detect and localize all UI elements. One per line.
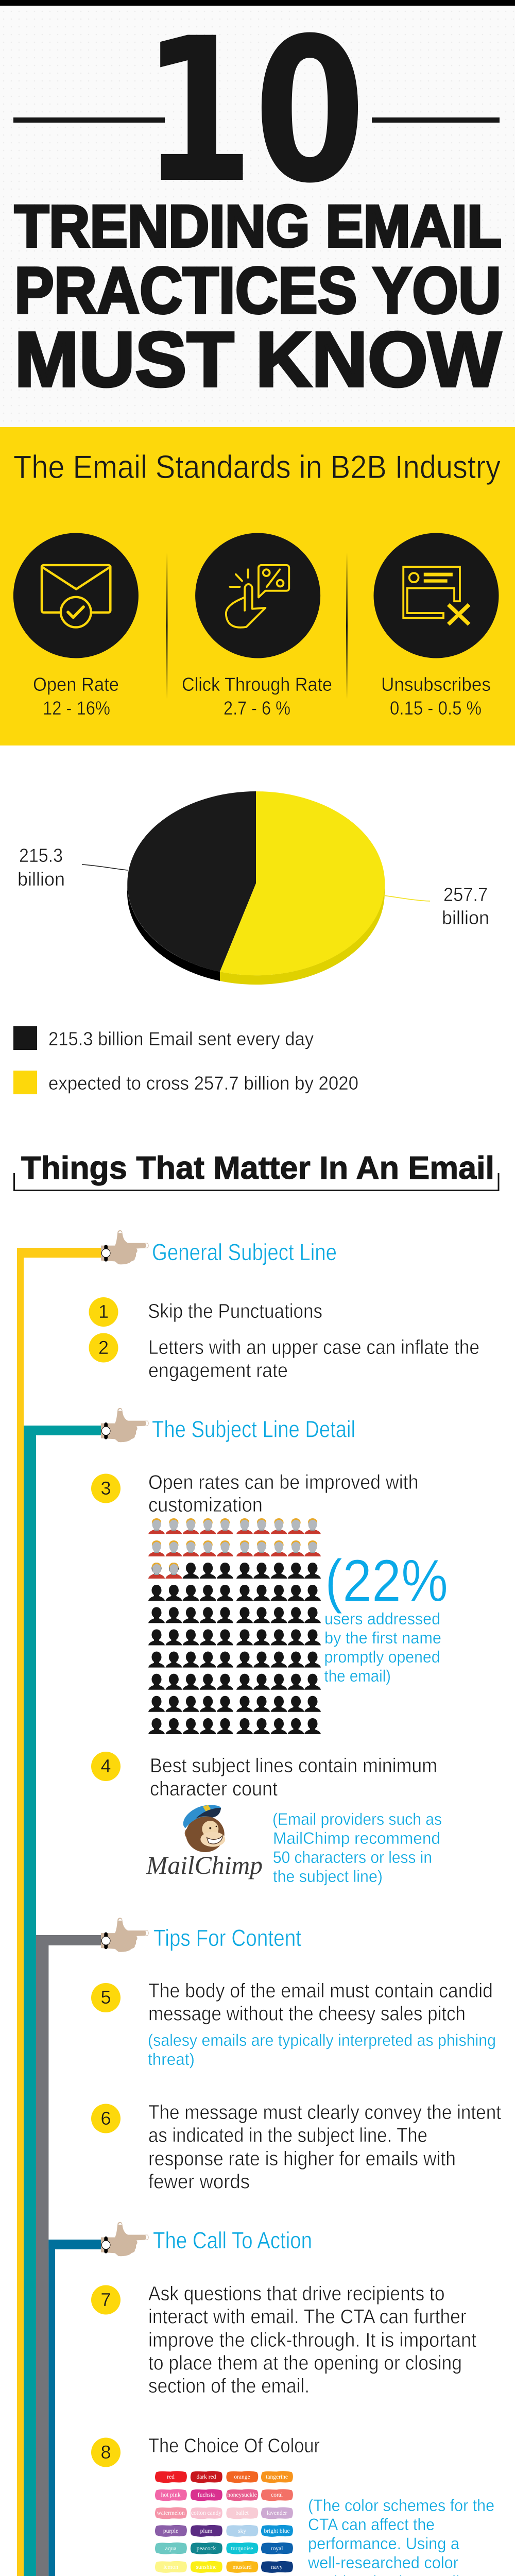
tip 5: The body of the email must contain candid xyxy=(148,1980,493,2002)
callout: mailchimp recommendation: the subject line) xyxy=(273,1867,383,1886)
colour swatches: dark red xyxy=(197,2474,216,2480)
colour swatches xyxy=(155,2471,293,2576)
colour swatches: ballet xyxy=(235,2510,249,2516)
colour swatches: turquoise xyxy=(231,2546,253,2552)
tip 4: 4 xyxy=(100,1755,111,1776)
tip 5 xyxy=(91,1980,496,2069)
tip 2: Letters with an upper case can inflate the xyxy=(148,1336,479,1359)
tip 5: message without the cheesy sales pitch xyxy=(148,2003,466,2025)
colour swatches: watermelon xyxy=(157,2510,185,2516)
colour swatches: fuchsia xyxy=(198,2492,215,2498)
tip 6: as indicated in the subject line. The xyxy=(148,2125,427,2146)
colour swatches: orange xyxy=(234,2474,250,2480)
colour swatches: tangerine xyxy=(266,2474,288,2480)
pie label right xyxy=(442,884,489,928)
callout: mailchimp recommendation: (Email providers such as xyxy=(272,1810,442,1828)
panel: email standards xyxy=(0,427,515,745)
section title: Tips For Content xyxy=(153,1925,301,1951)
icon: click percent xyxy=(195,533,320,658)
tip 2 xyxy=(89,1333,479,1382)
callout: mailchimp recommendation: MailChimp recommend xyxy=(273,1829,440,1848)
section title: General Subject Line xyxy=(152,1239,337,1265)
people pictogram 22 percent xyxy=(148,1518,321,1734)
callout: colour schemes: CTA can affect the xyxy=(308,2515,435,2534)
callout: 22 percent: (22% xyxy=(325,1547,448,1614)
tip 8: The Choice Of Colour xyxy=(148,2435,320,2457)
section title: The Call To Action xyxy=(153,2227,312,2253)
colour swatches: coral xyxy=(271,2492,283,2498)
callout: colour schemes: well-researched color xyxy=(307,2553,458,2572)
tip 7 xyxy=(91,2283,476,2397)
top black band xyxy=(0,0,515,6)
tip 7: improve the click-through. It is important xyxy=(148,2329,476,2351)
pie label left xyxy=(18,845,65,890)
colour swatches: honeysuckle xyxy=(227,2492,257,2498)
colour swatches: plum xyxy=(200,2528,212,2534)
colour swatches: aqua xyxy=(165,2546,176,2552)
callout: mailchimp recommendation: 50 characters or less in xyxy=(273,1848,432,1867)
tip 6: response rate is higher for emails with xyxy=(148,2148,456,2170)
colour swatches: red xyxy=(167,2474,175,2480)
tip 7: interact with email. The CTA can further xyxy=(148,2306,467,2328)
icon: unsubscribe window xyxy=(374,533,499,658)
tip 4: Best subject lines contain minimum xyxy=(150,1755,437,1777)
callout: mailchimp recommendation xyxy=(272,1810,442,1886)
tip 1: Skip the Punctuations xyxy=(148,1300,322,1323)
tip 5: 5 xyxy=(100,1987,111,2008)
stat: open rate: 12 - 16% xyxy=(43,698,110,719)
pie label left: billion xyxy=(18,869,65,890)
tip 2: 2 xyxy=(98,1337,109,1358)
tip 7: section of the email. xyxy=(148,2375,310,2397)
callout: colour schemes xyxy=(307,2496,494,2576)
tip 1: 1 xyxy=(98,1301,109,1322)
tip 3: Open rates can be improved with xyxy=(148,1471,418,1494)
colour swatches: navy xyxy=(271,2564,283,2570)
colour swatches: royal xyxy=(271,2546,283,2552)
callout: colour schemes: (The color schemes for the xyxy=(308,2496,494,2515)
section: general subject line xyxy=(89,1230,479,1382)
callout: 22 percent: promptly opened xyxy=(324,1648,440,1666)
big number 10: 10 xyxy=(142,0,366,227)
callout: colour schemes: performance. Using a xyxy=(308,2534,459,2553)
section: the subject line detail xyxy=(91,1408,448,1886)
colour swatches: mustard xyxy=(232,2564,252,2570)
legend xyxy=(13,1026,358,1094)
pie chart xyxy=(18,791,489,985)
stat: open rate xyxy=(33,674,119,719)
tip 8: 8 xyxy=(100,2442,111,2463)
tip 8 xyxy=(91,2435,320,2467)
colour swatches: lavender xyxy=(267,2510,287,2516)
colour swatches: sky xyxy=(238,2528,246,2534)
tip 3: customization xyxy=(148,1494,263,1516)
callout: 22 percent: by the first name xyxy=(324,1629,441,1647)
colour swatches: hot pink xyxy=(161,2492,181,2498)
tip 7: Ask questions that drive recipients to xyxy=(148,2283,445,2305)
stat: unsubscribes: 0.15 - 0.5 % xyxy=(390,698,482,719)
stat: unsubscribes: Unsubscribes xyxy=(381,674,491,695)
section title: The Subject Line Detail xyxy=(152,1416,355,1443)
tip 7: 7 xyxy=(100,2289,111,2310)
pie label right: 257.7 xyxy=(443,884,488,905)
divider right xyxy=(346,553,348,699)
icon: mailchimp logo: MailChimp xyxy=(146,1851,263,1879)
title block xyxy=(13,0,502,403)
tip 2: engagement rate xyxy=(148,1360,288,1382)
stat: click through rate: 2.7 - 6 % xyxy=(224,698,290,719)
tip 3 xyxy=(91,1471,418,1516)
pie label left: 215.3 xyxy=(19,845,63,866)
colour swatches: bright blue xyxy=(264,2528,290,2534)
callout: 22 percent: users addressed xyxy=(324,1609,440,1628)
title rule right xyxy=(372,117,500,123)
heading: things that matter: Things That Matter In An Email xyxy=(21,1150,494,1186)
pointing hand icon xyxy=(101,1918,149,1952)
stat: click through rate: Click Through Rate xyxy=(182,674,332,695)
stat: open rate: Open Rate xyxy=(33,674,119,695)
tip 6: 6 xyxy=(100,2108,111,2129)
colour swatches: purple xyxy=(163,2528,178,2534)
pointing hand icon xyxy=(101,2222,149,2256)
stat: click through rate xyxy=(182,674,332,719)
tip 4 xyxy=(91,1752,437,1800)
title panel background xyxy=(0,6,515,428)
tip 6 xyxy=(91,2102,501,2193)
icon: mailchimp logo xyxy=(146,1805,263,1879)
tip 1 xyxy=(89,1297,322,1327)
legend: expected to cross 257.7 billion by 2020 xyxy=(48,1073,358,1094)
title line 3: MUST KNOW xyxy=(14,315,501,403)
section: tips for content xyxy=(91,1918,501,2193)
pie label right: billion xyxy=(442,907,489,928)
legend: 215.3 billion Email sent every day xyxy=(48,1028,314,1049)
tip 5: threat) xyxy=(148,2050,195,2069)
stat: unsubscribes xyxy=(381,674,491,719)
icon: envelope with check xyxy=(13,533,139,658)
colour swatches: peacock xyxy=(197,2546,216,2552)
title rule left xyxy=(13,117,165,123)
tip 7: to place them at the opening or closing xyxy=(148,2352,462,2374)
pencil timeline xyxy=(16,1248,101,2576)
tip 6: fewer words xyxy=(148,2171,250,2193)
tip 3: 3 xyxy=(100,1478,111,1499)
divider left xyxy=(166,553,168,699)
callout: 22 percent: the email) xyxy=(324,1667,391,1685)
tip 4: character count xyxy=(150,1778,278,1800)
section: the call to action xyxy=(91,2222,494,2576)
colour swatches: cotton candy xyxy=(191,2510,221,2516)
pointing hand icon xyxy=(101,1230,149,1264)
colour swatches: lemon xyxy=(163,2564,178,2570)
callout: 22 percent xyxy=(324,1547,448,1685)
pointing hand icon xyxy=(101,1408,149,1442)
colour swatches: sunshine xyxy=(196,2564,217,2570)
tip 5: (salesy emails are typically interpreted as phishing xyxy=(148,2031,496,2049)
title line 1: TRENDING EMAIL xyxy=(14,194,502,260)
